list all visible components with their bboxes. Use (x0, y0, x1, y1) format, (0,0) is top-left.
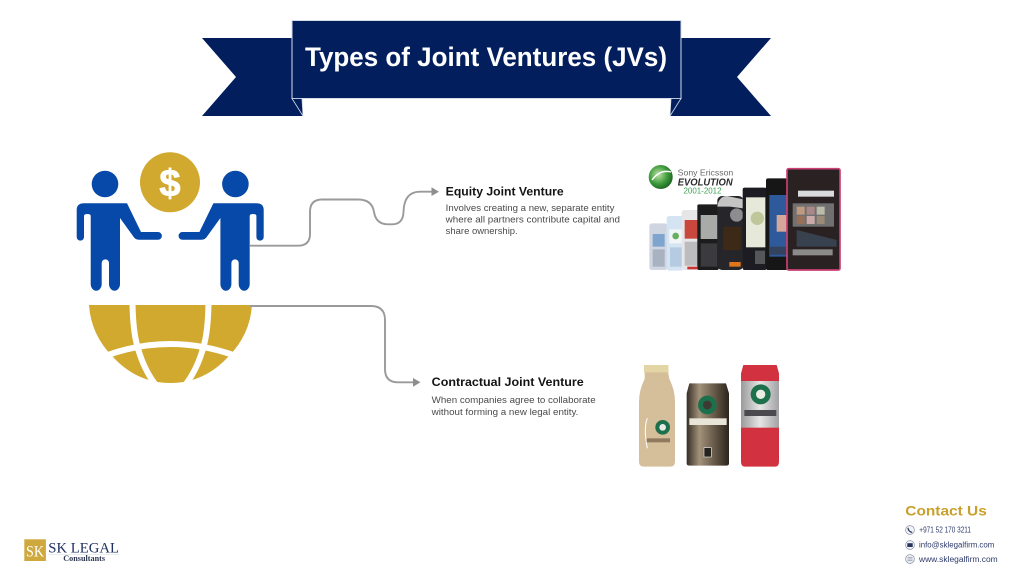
logo wordmark: SK LEGAL (48, 540, 119, 556)
arrow: to equity joint venture (250, 187, 439, 246)
icon: dollar coin: $ (159, 163, 181, 205)
can: Doubleshot (687, 383, 729, 466)
description: equity joint venture: Involves creating a new, separate entity (446, 203, 615, 213)
banner right fold (670, 98, 681, 116)
title: Types of Joint Ventures (JVs) (305, 42, 667, 72)
icon: two partners with dollar coin (77, 152, 264, 291)
description: contractual joint venture (431, 395, 596, 417)
logo mark: SK (26, 544, 45, 560)
phone 6 (743, 188, 767, 270)
can: Refreshers (741, 365, 779, 467)
logo wordmark: Consultants (63, 553, 106, 563)
heading: equity joint venture: Equity Joint Venture (446, 186, 564, 198)
phone 2 (667, 216, 683, 271)
description: equity joint venture: where all partners contribute capital and (445, 214, 620, 224)
banner right tail (670, 38, 771, 116)
contact: email: info@sklegalfirm.com (919, 540, 995, 549)
phone 5 (717, 196, 743, 270)
arrow: to contractual joint venture (250, 306, 420, 387)
description: contractual joint venture: When companies agree to collaborate (432, 395, 596, 405)
contact: website: www.sklegalfirm.com (918, 555, 998, 564)
title banner (202, 20, 771, 116)
description: equity joint venture: share ownership. (446, 226, 518, 236)
banner left tail (202, 38, 303, 116)
icon: left person (77, 171, 162, 291)
phone 3 (682, 210, 699, 270)
logo: Sony Ericsson evolution: Sony Ericsson (678, 168, 734, 178)
contact block (905, 503, 998, 564)
heading: contractual joint venture: Contractual Joint Venture (432, 377, 584, 389)
logo: SK Legal Consultants (24, 539, 119, 563)
image: Starbucks drinks (639, 365, 779, 467)
text block: equity joint venture (445, 186, 620, 236)
text block: contractual joint venture (431, 377, 596, 417)
icon: right person (179, 171, 264, 291)
description: equity joint venture (445, 203, 620, 236)
contact: phone: +971 52 170 3211 (919, 526, 971, 534)
banner main panel (292, 20, 681, 98)
logo: Sony Ericsson evolution: EVOLUTION (678, 176, 733, 188)
phone 8 (787, 169, 840, 270)
icon: dollar coin (140, 152, 200, 212)
phone 1 (649, 223, 667, 270)
phone 4 (697, 204, 719, 270)
phone 7 (766, 178, 788, 270)
description: contractual joint venture: without forming a new legal entity. (431, 407, 578, 417)
icon: half globe (89, 304, 252, 384)
banner left fold (292, 98, 303, 116)
phones row (649, 169, 840, 271)
bottle: Frappuccino (639, 365, 675, 467)
image: Sony Ericsson phones evolution (649, 165, 840, 271)
logo: Sony Ericsson evolution: 2001-2012 (684, 186, 722, 196)
contact heading: Contact Us (905, 503, 987, 519)
logo: Sony Ericsson evolution (649, 165, 734, 196)
